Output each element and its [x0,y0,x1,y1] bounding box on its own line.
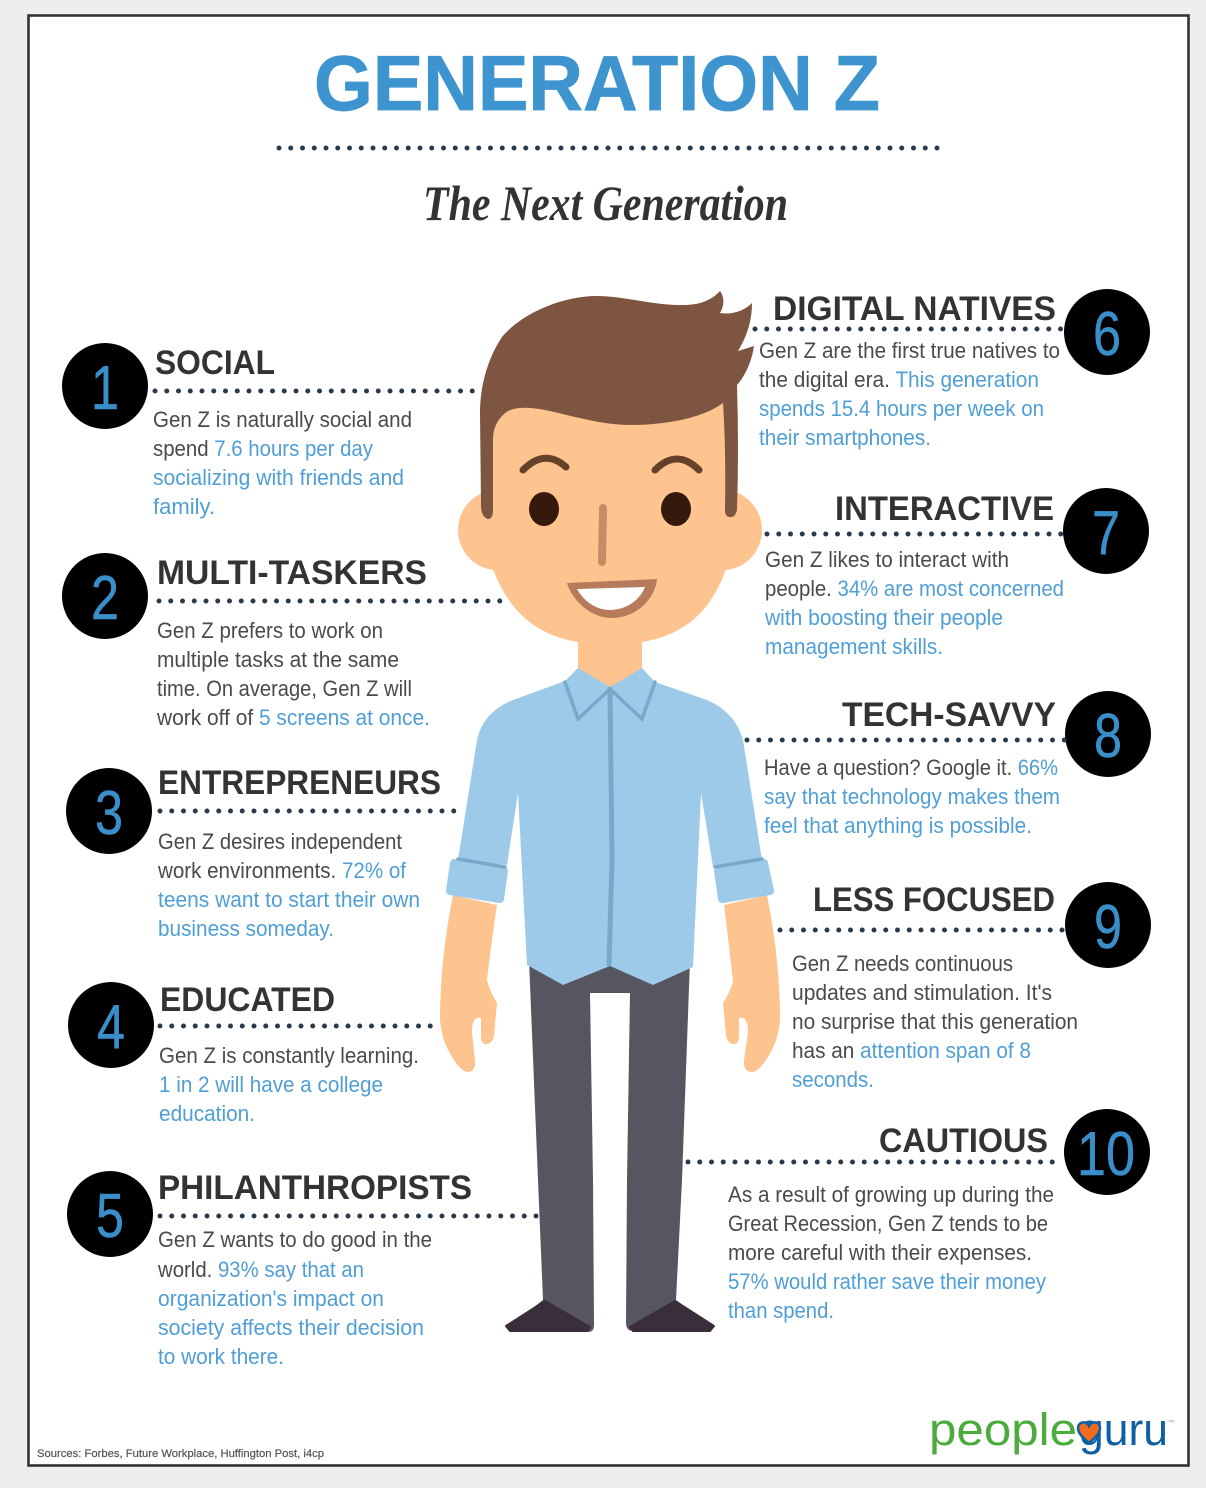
body text: with boosting their people [764,605,1003,630]
title: GENERATION Z [314,39,880,127]
body text: family. [153,494,215,519]
number badge: 6 [1093,300,1121,369]
shirt details [458,682,762,964]
icon: heart [1078,1422,1100,1443]
number badge [1064,289,1150,375]
body text: people. 34% are most concerned [765,576,1064,601]
heading: ENTREPRENEURS [158,764,441,802]
body text: world. 93% say that an [157,1257,364,1282]
number badge [1063,488,1149,574]
body text [159,1043,419,1126]
heading: EDUCATED [160,981,335,1019]
body text: Gen Z needs continuous [792,951,1013,976]
neck [578,630,642,690]
body text: Gen Z is constantly learning. [159,1043,419,1068]
heading: TECH-SAVVY [842,696,1056,734]
number badge [62,343,148,429]
heading: SOCIAL [155,344,275,382]
body text: multiple tasks at the same [157,647,399,672]
body text: management skills. [765,634,943,659]
body text: Gen Z is naturally social and [153,407,412,432]
body text: Gen Z desires independent [158,829,402,854]
body text: Have a question? Google it. 66% [764,755,1058,780]
body text: Gen Z prefers to work on [157,618,383,643]
body text: work off of 5 screens at once. [156,705,430,730]
number badge: 1 [91,354,119,423]
number badge: 3 [95,779,123,848]
number badge: 7 [1092,499,1120,568]
body text [156,618,430,730]
body text: society affects their decision [158,1315,424,1340]
item 4: educated [68,981,434,1126]
hair [480,291,754,519]
body text [759,338,1060,450]
number badge: 10 [1077,1120,1135,1189]
item 2: multi-taskers [62,553,503,730]
number badge: 4 [97,993,125,1062]
subtitle: The Next Generation [423,175,788,231]
number badge: 2 [91,564,119,633]
heading: LESS FOCUSED [813,881,1055,919]
number badge: 8 [1094,702,1122,771]
body text [792,951,1078,1092]
legs [520,960,700,1332]
face [484,390,736,642]
heading: INTERACTIVE [835,490,1054,528]
number badge [1065,882,1151,968]
body text: education. [159,1101,255,1126]
body text: Gen Z likes to interact with [765,547,1009,572]
body text: 57% would rather save their money [728,1269,1046,1294]
cuffs [450,863,504,899]
heading: CAUTIOUS [879,1122,1048,1160]
body text [157,829,420,941]
logo: peopleguru: ™ [1168,1419,1174,1426]
body text: organization's impact on [158,1286,384,1311]
body text: work environments. 72% of [157,858,407,883]
item 5: philanthropists [67,1169,540,1369]
body text: Gen Z are the first true natives to [759,338,1060,363]
body text: 1 in 2 will have a college [159,1072,383,1097]
heading: MULTI-TASKERS [157,554,427,592]
body text [728,1182,1054,1323]
shoes [506,1301,590,1331]
logo: peopleguru [929,1404,1174,1455]
body text: Gen Z wants to do good in the [158,1227,432,1252]
sources: Sources: Forbes, Future Workplace, Huffington Post, i4cp [37,1448,324,1460]
shirt [458,668,762,985]
body text: business someday. [158,916,334,941]
number badge [67,1171,153,1257]
body text: seconds. [792,1067,874,1092]
mouth [567,579,657,618]
eyebrows [523,458,699,470]
item 8: tech-savvy [747,691,1151,838]
body text: teens want to start their own [158,887,420,912]
arms [440,895,497,1072]
body text [153,407,412,519]
nose [602,508,603,562]
item 9: less focused [780,881,1151,1092]
body text: their smartphones. [759,425,931,450]
item 1: social [62,343,476,519]
logo: peopleguru: guru [1079,1404,1168,1455]
body text: more careful with their expenses. [728,1240,1032,1265]
body text: to work there. [158,1344,284,1369]
logo: peopleguru: people [929,1404,1077,1455]
item 10: cautious [688,1109,1150,1323]
body text: time. On average, Gen Z will [157,676,412,701]
body text: say that technology makes them [764,784,1060,809]
body text [764,755,1060,838]
number badge [1065,691,1151,777]
body text: than spend. [728,1298,834,1323]
body text [157,1227,432,1369]
number badge [62,553,148,639]
character illustration [440,291,780,1332]
number badge [1064,1109,1150,1195]
body text: the digital era. This generation [759,367,1039,392]
heading: PHILANTHROPISTS [158,1169,472,1207]
body text: socializing with friends and [153,465,404,490]
body text: spends 15.4 hours per week on [759,396,1044,421]
heading: DIGITAL NATIVES [773,290,1056,328]
number badge: 5 [96,1182,124,1251]
body text: As a result of growing up during the [728,1182,1054,1207]
body text: spend 7.6 hours per day [153,436,373,461]
number badge: 9 [1094,893,1122,962]
item 6: digital natives [755,289,1150,450]
number badge [66,768,152,854]
ears [458,490,536,570]
body text: no surprise that this generation [792,1009,1078,1034]
body text: Great Recession, Gen Z tends to be [728,1211,1048,1236]
item 3: entrepreneurs [66,764,458,941]
body text: updates and stimulation. It's [792,980,1052,1005]
body text: feel that anything is possible. [764,813,1032,838]
item 7: interactive [764,488,1149,659]
eyes [529,492,559,526]
number badge [68,982,154,1068]
body text: has an attention span of 8 [792,1038,1031,1063]
body text [764,547,1064,659]
